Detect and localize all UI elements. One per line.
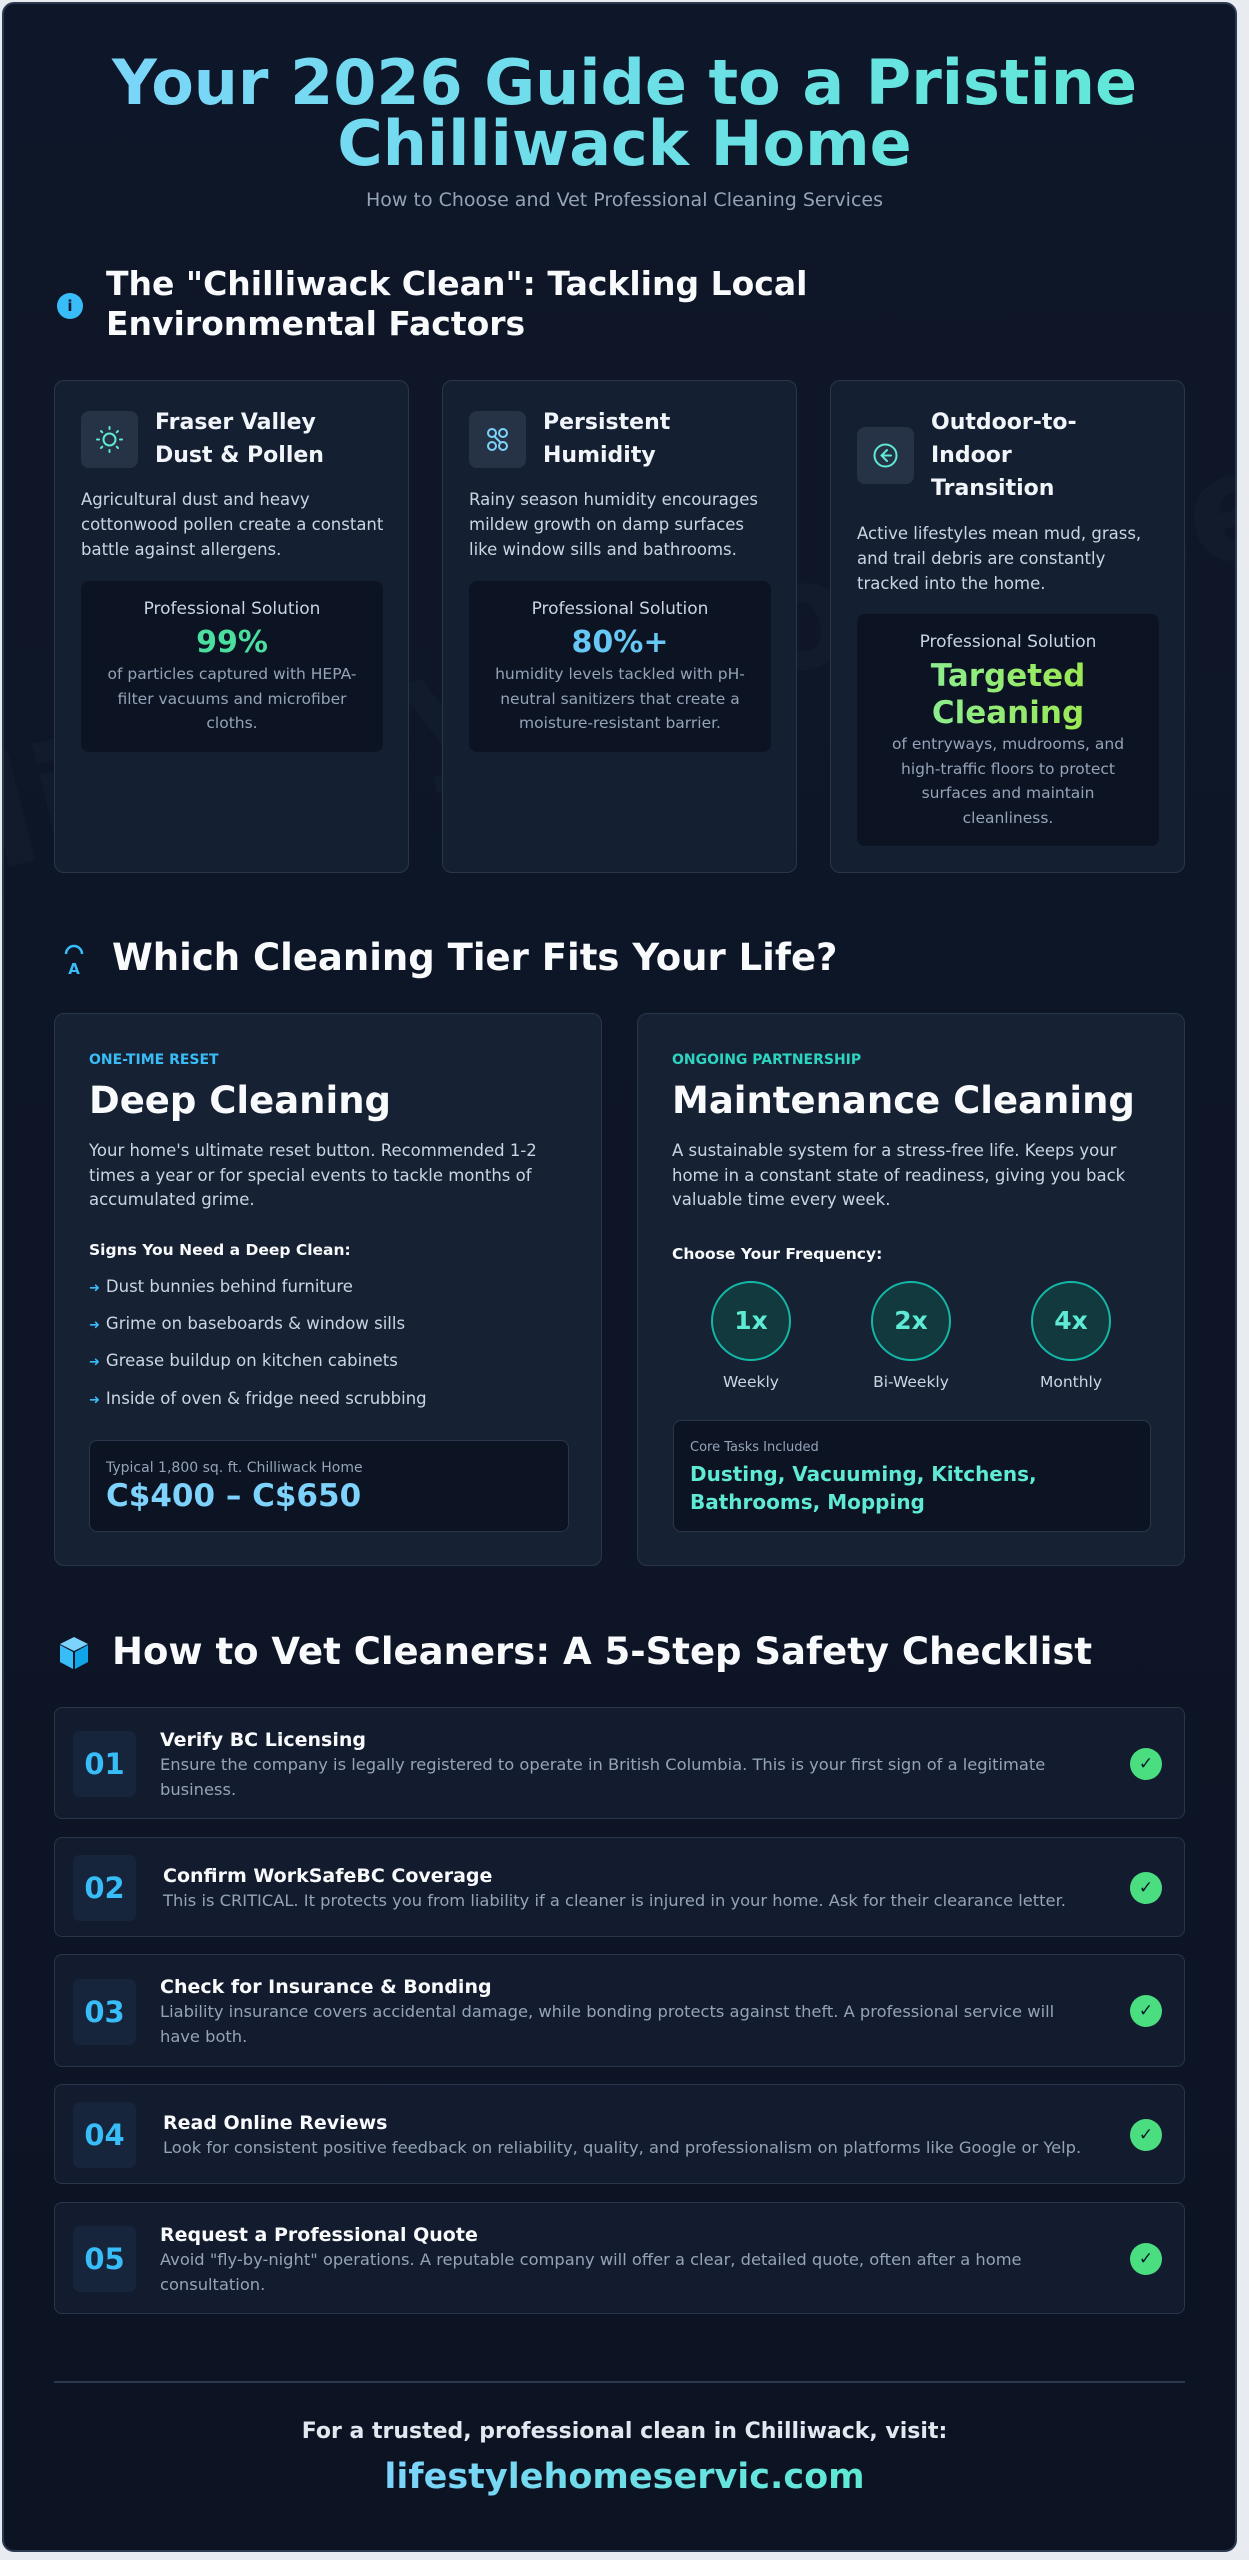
checklist step 01 — [54, 1707, 1185, 1819]
icon: cube — [60, 1637, 88, 1669]
checklist step 01: Verify BC Licensing — [160, 1729, 366, 1751]
solution box: 80%+ — [572, 625, 668, 660]
signs list: ➜ Inside of oven & fridge need scrubbing — [89, 1389, 427, 1408]
card title: Fraser Valley — [155, 410, 316, 435]
frequency circles: Bi-Weekly — [873, 1373, 949, 1391]
solution box — [81, 581, 383, 752]
footer url: lifestylehomeservic.com — [384, 2457, 865, 2497]
checklist step 02 — [54, 1837, 1185, 1937]
checklist step 05 — [54, 2202, 1185, 2314]
card description: Agricultural dust and heavy cottonwood pollen create a constant battle against allergens. — [81, 490, 383, 559]
solution box: 99% — [196, 625, 268, 660]
heading: environmental factors: The "Chilliwack Clean": Tackling Local — [106, 264, 807, 303]
checklist step 02: ✓ — [1139, 1878, 1153, 1898]
checklist step 04 — [54, 2084, 1185, 2184]
checklist step 04: Read Online Reviews — [163, 2112, 387, 2134]
checklist step 02: 02 — [84, 1871, 125, 1905]
signs heading: Signs You Need a Deep Clean: — [89, 1241, 351, 1259]
card title: Dust & Pollen — [155, 443, 324, 468]
card description: Rainy season humidity encourages mildew growth on damp surfaces like window sills and bathrooms. — [469, 490, 758, 559]
solution box: Professional Solution — [920, 632, 1096, 652]
solution box: of entryways, mudrooms, and high-traffic floors to protect surfaces and maintain cleanliness. — [892, 735, 1124, 826]
solution box: of particles captured with HEPA-filter vacuums and microfiber cloths. — [108, 665, 356, 732]
checklist step 04: 04 — [84, 2118, 125, 2152]
checklist step 03: ✓ — [1139, 2001, 1153, 2021]
icon: arrow circle — [857, 427, 914, 484]
checklist step 03 — [54, 1954, 1185, 2067]
panel: dust & pollen — [54, 380, 409, 873]
title: Chilliwack Home — [337, 107, 912, 180]
solution box: humidity levels tackled with pH-neutral sanitizers that create a moisture-resistant barrier. — [495, 665, 745, 732]
tier title: Deep Cleaning — [89, 1079, 391, 1122]
frequency circles: Weekly — [723, 1373, 779, 1391]
checklist step 05: ✓ — [1139, 2249, 1153, 2269]
heading: environmental factors — [106, 264, 807, 343]
checklist step 05: Request a Professional Quote — [160, 2224, 478, 2246]
checklist step 01: ✓ — [1139, 1754, 1153, 1774]
core tasks box: Dusting, Vacuuming, Kitchens, Bathrooms, Mopping — [690, 1462, 1037, 1514]
card title: Transition — [931, 476, 1054, 501]
card title: Outdoor-to- — [931, 410, 1077, 435]
heading: environmental factors: Environmental Factors — [106, 304, 525, 343]
checklist step 01: 01 — [84, 1747, 125, 1781]
card title — [543, 410, 670, 468]
card description: Active lifestyles mean mud, grass, and trail debris are constantly tracked into the home. — [857, 524, 1141, 593]
tier description: Your home's ultimate reset button. Recommended 1-2 times a year or for special events to tackle months of accumulated grime. — [89, 1141, 537, 1209]
frequency heading: Choose Your Frequency: — [672, 1245, 882, 1263]
checklist step 01: Ensure the company is legally registered to operate in British Columbia. This is your first sign of a legitimate business. — [160, 1755, 1045, 1798]
title — [0, 52, 1249, 174]
signs list: ➜ Dust bunnies behind furniture — [89, 1277, 353, 1296]
checklist step 02: Confirm WorkSafeBC Coverage — [163, 1865, 492, 1887]
frequency circles: 2x — [894, 1306, 928, 1335]
label: ONGOING PARTNERSHIP — [672, 1052, 861, 1068]
checklist step 05: Avoid "fly-by-night" operations. A reputable company will offer a clear, detailed quote, often after a home consultation. — [160, 2250, 1022, 2294]
panel: humidity — [442, 380, 797, 873]
frequency circles: 4x — [1054, 1306, 1088, 1335]
icon: info — [57, 293, 83, 319]
panel: deep cleaning — [54, 1013, 602, 1566]
checklist step 04: Look for consistent positive feedback on reliability, quality, and professionalism on platforms like Google or Yelp. — [163, 2138, 1081, 2157]
subtitle: How to Choose and Vet Professional Cleaning Services — [366, 189, 883, 211]
panel: maintenance cleaning — [637, 1013, 1185, 1566]
price box — [89, 1440, 569, 1532]
checklist step 03: 03 — [84, 1995, 125, 2029]
solution box — [857, 614, 1159, 846]
card title: Humidity — [543, 443, 656, 468]
heading: cleaning tier: Which Cleaning Tier Fits Your Life? — [112, 936, 838, 979]
tier description: A sustainable system for a stress-free life. Keeps your home in a constant state of readiness, giving you back valuable time every week. — [672, 1141, 1125, 1209]
card title: Indoor — [931, 443, 1012, 468]
frequency circles: 1x — [734, 1306, 768, 1335]
icon: info: i — [67, 297, 73, 315]
heading: checklist: How to Vet Cleaners: A 5-Step Safety Checklist — [112, 1630, 1092, 1673]
solution box — [469, 581, 771, 752]
frequency circles: Monthly — [1040, 1373, 1102, 1391]
label: ONE-TIME RESET — [89, 1052, 219, 1068]
title: Your 2026 Guide to a Pristine — [112, 46, 1137, 119]
icon: tier — [64, 944, 84, 976]
checklist step 04: ✓ — [1139, 2125, 1153, 2145]
signs list — [89, 1277, 427, 1408]
checklist step 05: 05 — [84, 2242, 125, 2276]
panel: outdoor-to-indoor — [830, 380, 1185, 873]
core tasks box: Core Tasks Included — [690, 1440, 819, 1455]
core tasks box — [673, 1420, 1151, 1532]
price box: Typical 1,800 sq. ft. Chilliwack Home — [106, 1460, 363, 1476]
tier title: Maintenance Cleaning — [672, 1079, 1135, 1122]
checklist step 03: Liability insurance covers accidental damage, while bonding protects against theft. A professional service will have both. — [160, 2002, 1054, 2046]
signs list: ➜ Grime on baseboards & window sills — [89, 1314, 405, 1333]
solution box: Professional Solution — [144, 599, 320, 619]
solution box: Cleaning — [932, 695, 1084, 731]
solution box: Professional Solution — [532, 599, 708, 619]
solution box: Targeted — [931, 658, 1085, 694]
footer call to action: For a trusted, professional clean in Chilliwack, visit: — [302, 2419, 947, 2444]
card title — [931, 410, 1077, 501]
card title — [155, 410, 324, 468]
checklist step 03: Check for Insurance & Bonding — [160, 1976, 492, 1998]
signs list: ➜ Grease buildup on kitchen cabinets — [89, 1351, 398, 1370]
frequency circles — [711, 1281, 1111, 1391]
checklist step 02: This is CRITICAL. It protects you from liability if a cleaner is injured in your home. Ask for their clearance letter. — [163, 1891, 1066, 1910]
icon: humidity — [469, 411, 526, 468]
card title: Persistent — [543, 410, 670, 435]
price box: C$400 – C$650 — [106, 1478, 361, 1514]
icon: sun — [81, 411, 138, 468]
